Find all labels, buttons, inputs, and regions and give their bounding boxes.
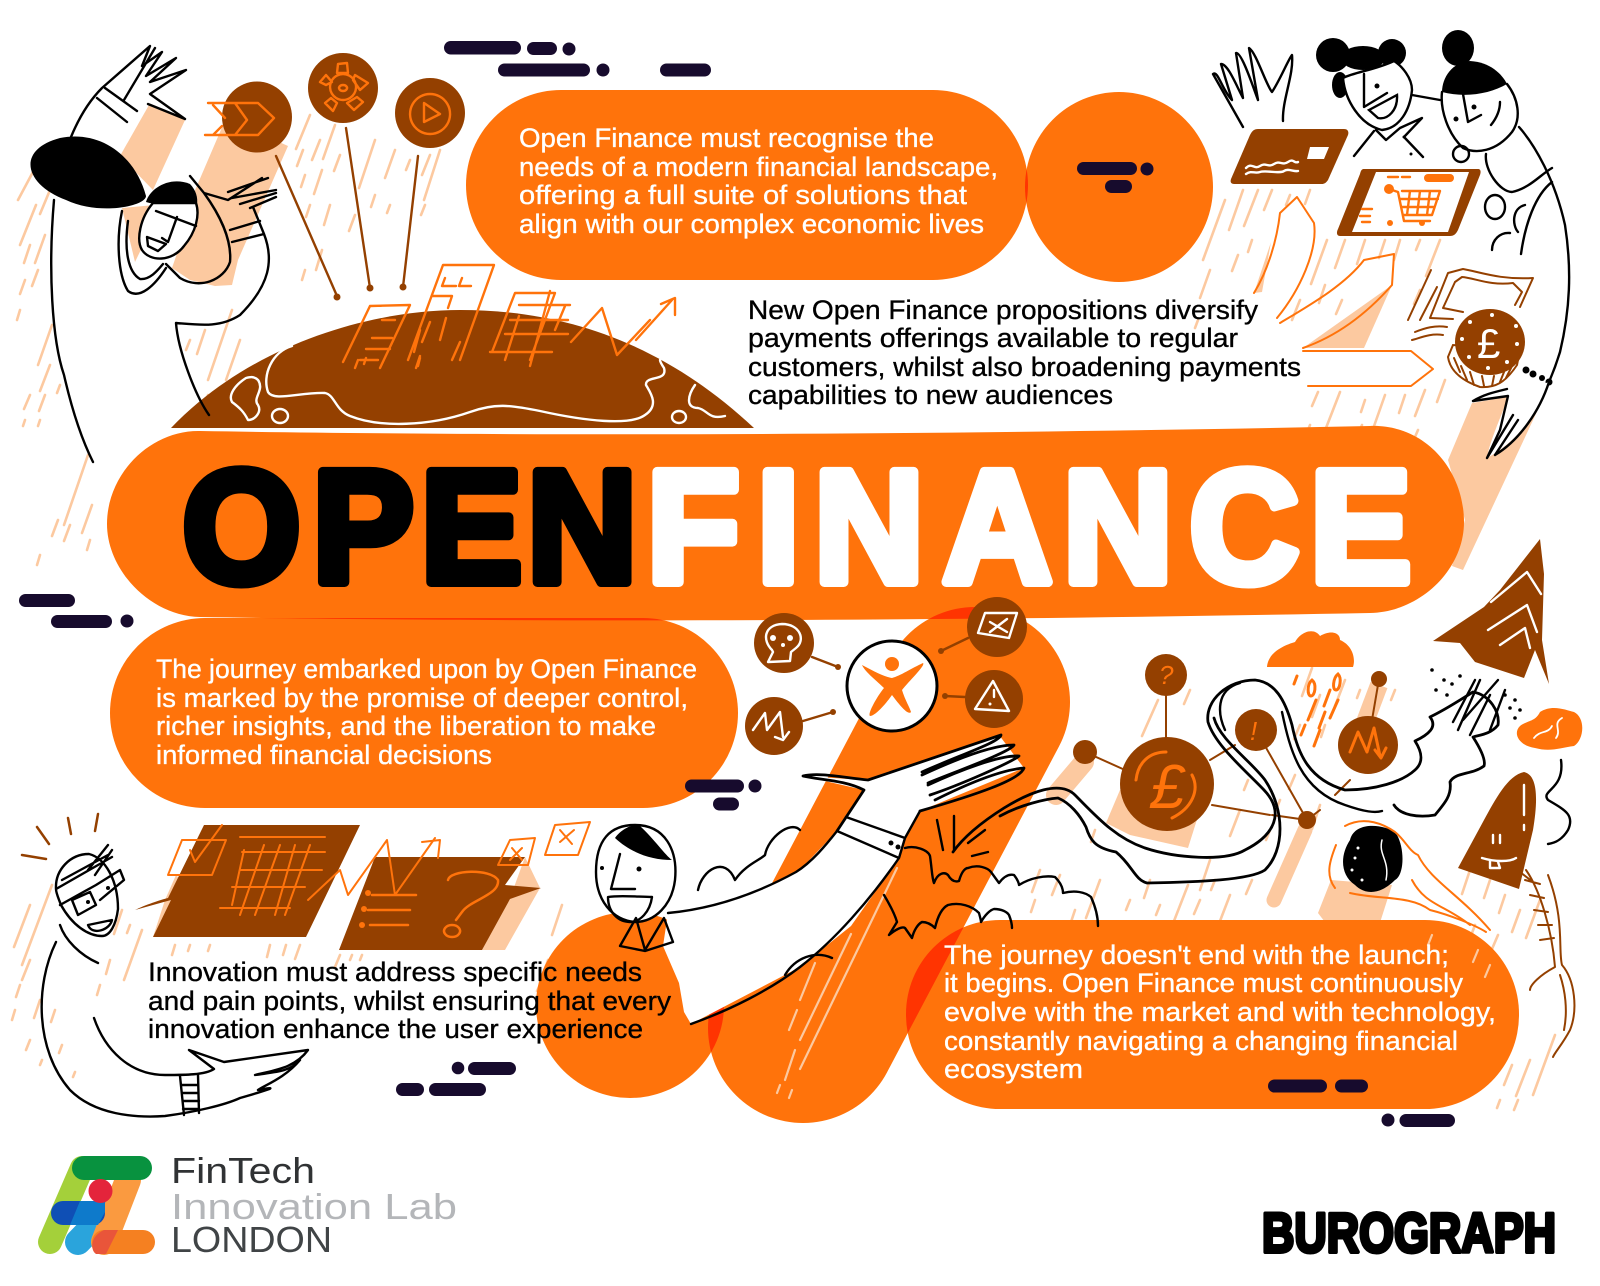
text block: payments propositions: customers, whilst also broadening payments — [748, 352, 1301, 382]
text block: the journey embarked: richer insights, and the liberation to make — [156, 711, 656, 741]
network of money nodes: £ — [1149, 753, 1186, 822]
logo: FinTech Innovation Lab London: Innovation Lab — [171, 1186, 457, 1227]
illustration: globe dome with city — [171, 265, 754, 428]
text block: modern financial landscape: Open Finance must recognise the — [519, 123, 934, 153]
illustration: man throwing with big hand — [596, 735, 1098, 1024]
peach bands behind characters — [120, 105, 1548, 950]
black squiggle road and cloud outline — [953, 680, 1498, 883]
text block: journey does not end: The journey doesn't end with the launch; — [944, 940, 1449, 970]
text block: journey does not end: ecosystem — [944, 1054, 1083, 1084]
text block: journey does not end: constantly navigating a changing financial — [944, 1026, 1458, 1056]
text block: journey does not end: it begins. Open Finance must continuously — [944, 968, 1464, 998]
text block: innovation needs: innovation enhance the user experience — [148, 1014, 643, 1044]
main title — [182, 438, 1411, 617]
text block: modern financial landscape: offering a full suite of solutions that — [519, 180, 968, 210]
illustration: rocket and burst — [1430, 539, 1549, 735]
main title: FINANCE — [647, 438, 1411, 617]
text block: innovation needs: and pain points, whilst ensuring that every — [148, 986, 672, 1016]
text block: the journey embarked: is marked by the promise of deeper control, — [156, 683, 688, 713]
text block: payments propositions: New Open Finance propositions diversify — [748, 295, 1259, 325]
illustration: brown mushroom character with root — [1458, 760, 1574, 1057]
dark dash marks — [19, 41, 1455, 1127]
text block: modern financial landscape — [519, 123, 998, 239]
text block: the journey embarked: The journey embarked upon by Open Finance — [156, 654, 697, 684]
arrows pointing to coin — [1254, 197, 1433, 386]
text block: payments propositions — [748, 295, 1301, 410]
illustration: bomb with flames — [1329, 821, 1490, 932]
icon: rain cloud — [1267, 631, 1582, 750]
main title: OPEN — [182, 438, 637, 617]
pale streaks on diagonal pill — [777, 868, 1490, 1098]
logo: FinTech Innovation Lab London: LONDON — [171, 1219, 332, 1260]
orange background pills — [107, 90, 1519, 1109]
network of money nodes: ? — [1159, 660, 1174, 690]
text block: the journey embarked — [156, 654, 697, 770]
text block: modern financial landscape: needs of a modern financial landscape, — [519, 152, 998, 182]
infographic boards with speech pointers — [135, 822, 590, 950]
text block: modern financial landscape: align with our complex economic lives — [519, 209, 984, 239]
network of money nodes — [1073, 654, 1398, 831]
network of money nodes: ! — [1250, 716, 1257, 746]
decorative rain streaks — [12, 105, 1555, 1110]
text block: journey does not end: evolve with the market and with technology, — [944, 997, 1496, 1027]
text block: payments propositions: capabilities to new audiences — [748, 380, 1113, 410]
logo: FinTech Innovation Lab London: FinTech — [171, 1150, 315, 1191]
illustration: woman with raised hands — [30, 46, 276, 462]
illustration: man with glasses and open hand — [22, 814, 308, 1117]
illustration: banknote, pound coin and hand: £ — [1477, 320, 1500, 367]
logo: FinTech Innovation Lab London — [50, 1150, 457, 1260]
icon circles above globe — [205, 53, 465, 300]
illustration: card and tablet shoppers — [1213, 30, 1569, 382]
text block: the journey embarked: informed financial decisions — [156, 740, 492, 770]
icons: cheat sheet around person symbol — [745, 597, 1027, 755]
text block: innovation needs — [148, 957, 672, 1044]
text block: journey does not end — [944, 940, 1496, 1084]
text block: payments propositions: payments offerings available to regular — [748, 323, 1238, 353]
text block: innovation needs: Innovation must address specific needs — [148, 957, 642, 987]
illustration: banknote, pound coin and hand — [1408, 269, 1552, 458]
